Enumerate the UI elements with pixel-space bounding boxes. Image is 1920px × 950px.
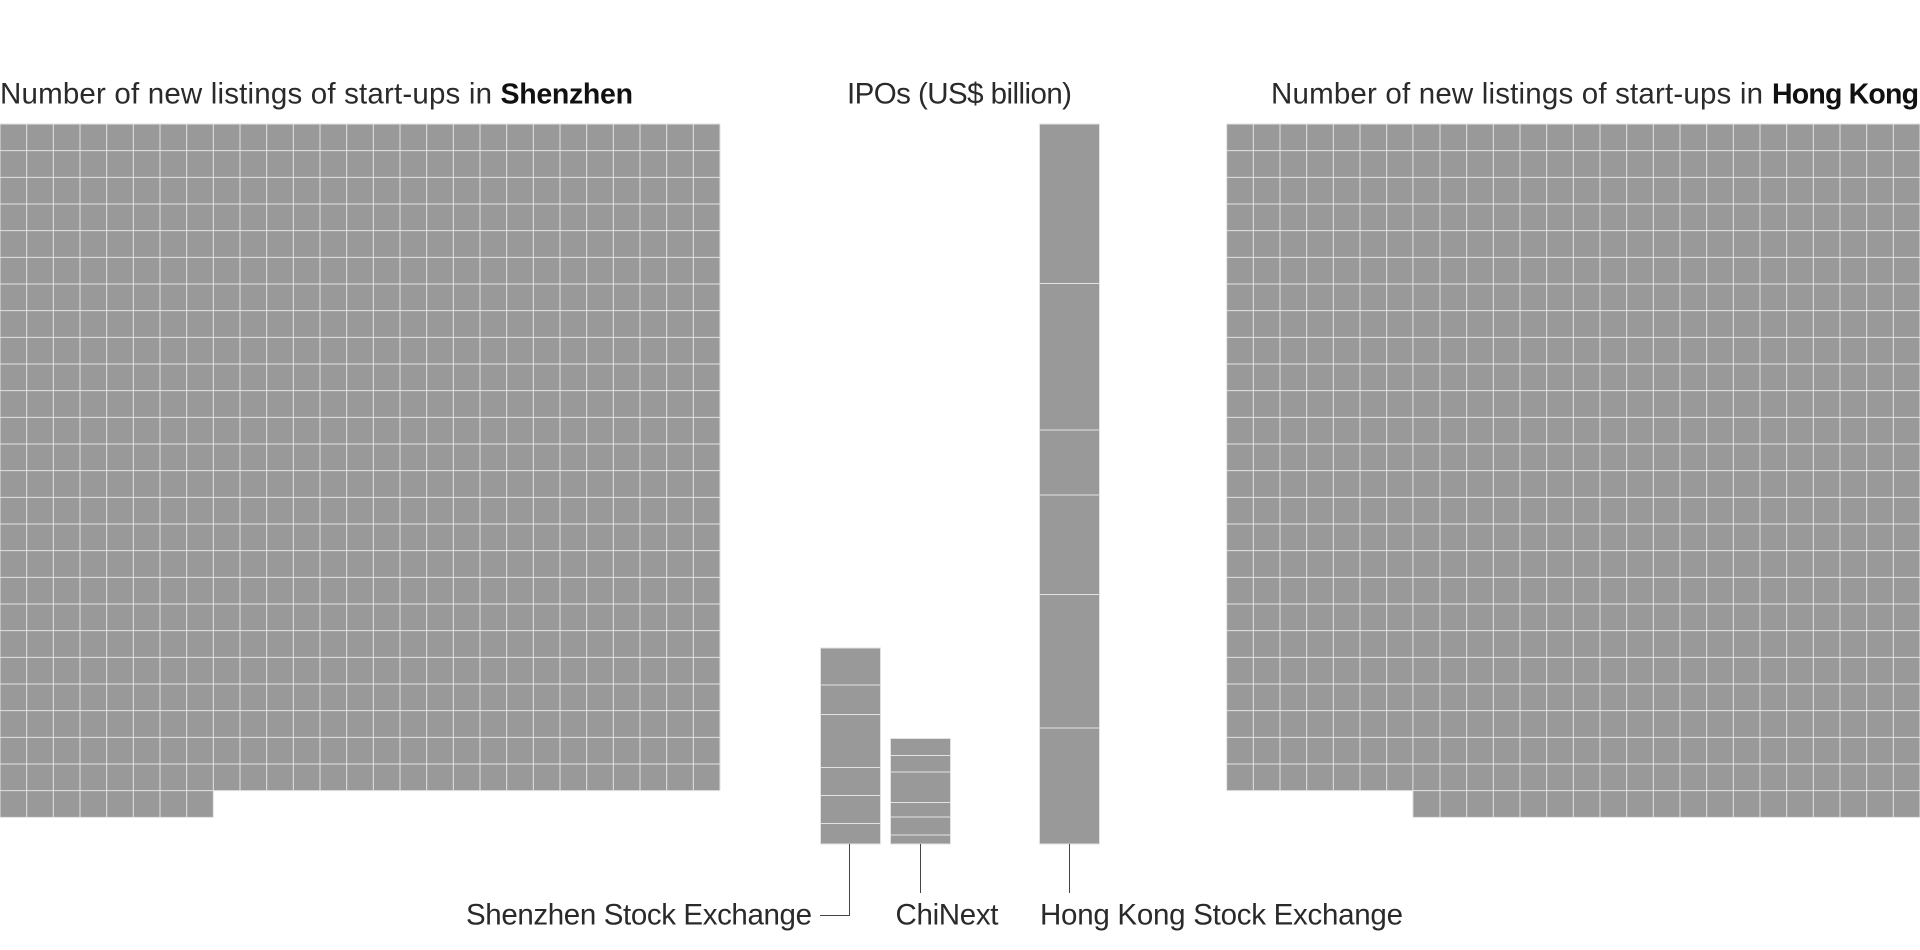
label with leader: Shenzhen Stock Exchange: Shenzhen Stock Exchange <box>466 898 812 932</box>
label with leader: Hong Kong Stock Exchange: Hong Kong Stock Exchange <box>1040 898 1403 932</box>
panel: Shenzhen new listings <box>0 78 720 817</box>
heading: Hong Kong listings: Hong Kong <box>1772 78 1919 110</box>
unit grid: Shenzhen listings <box>0 124 720 817</box>
panel: Hong Kong new listings <box>1227 78 1920 817</box>
bar: Shenzhen Stock Exchange <box>820 648 880 844</box>
label with leader: Shenzhen Stock Exchange <box>466 844 850 932</box>
heading: IPOs: IPOs (US$ billion) <box>847 78 1072 110</box>
label with leader: ChiNext <box>896 844 998 932</box>
label with leader: ChiNext: ChiNext <box>896 898 998 932</box>
bar: ChiNext <box>890 738 950 844</box>
heading: Shenzhen listings: Number of new listings of start-ups in <box>0 78 492 110</box>
unit grid: Hong Kong listings <box>1227 124 1920 817</box>
heading: Hong Kong listings: Number of new listings of start-ups in <box>1271 78 1763 110</box>
heading: Shenzhen listings: Shenzhen <box>500 78 633 110</box>
bar: Hong Kong Stock Exchange <box>1040 124 1100 844</box>
panel: IPO values <box>466 78 1403 932</box>
